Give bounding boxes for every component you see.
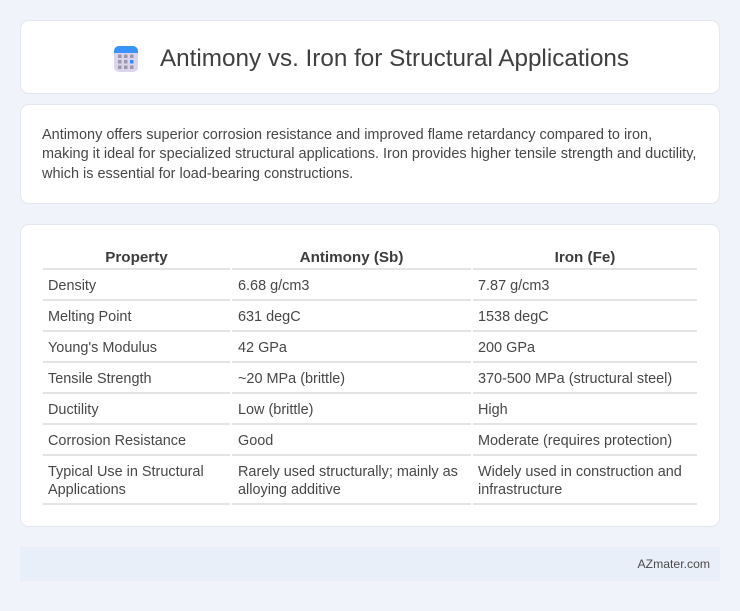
comparison table: 631 degC (238, 309, 301, 325)
header: property: Property (105, 249, 168, 266)
comparison table: 370-500 MPa (structural steel) (478, 371, 672, 387)
summary text: which is essential for load-bearing constructions. (42, 166, 353, 182)
row: youngs modulus (48, 340, 536, 356)
row: tensile strength: Tensile Strength (48, 371, 152, 387)
comparison table: Good (238, 433, 273, 449)
summary text: making it ideal for specialized structural applications. Iron provides higher tensile strength and ductility, (42, 146, 696, 162)
row: density (48, 278, 549, 294)
comparison table: Low (brittle) (238, 402, 313, 418)
row: ductility (48, 402, 508, 418)
row: density: Density (48, 278, 96, 294)
comparison table: alloying additive (238, 482, 341, 498)
title: Antimony vs. Iron for Structural Applications (160, 45, 629, 72)
row: typical use: Typical Use in Structural (48, 464, 204, 480)
summary card (20, 104, 720, 204)
row: corrosion resistance (48, 433, 672, 449)
comparison table: High (478, 402, 508, 418)
row: typical use: Applications (48, 482, 126, 498)
row: ductility: Ductility (48, 402, 99, 418)
row: corrosion resistance: Corrosion Resistance (48, 433, 186, 449)
row: typical use (48, 464, 682, 498)
table card (20, 224, 720, 527)
comparison table: 200 GPa (478, 340, 535, 356)
row: melting point: Melting Point (48, 309, 131, 325)
summary text (42, 127, 696, 182)
row: youngs modulus: Young's Modulus (48, 340, 157, 356)
comparison table: ~20 MPa (brittle) (238, 371, 345, 387)
comparison table: 7.87 g/cm3 (478, 278, 549, 294)
summary text: Antimony offers superior corrosion resistance and improved flame retardancy compared to iron, (42, 127, 652, 143)
comparison table (43, 249, 697, 505)
comparison table: 42 GPa (238, 340, 287, 356)
footer bar (20, 547, 720, 581)
header: antimony: Antimony (Sb) (300, 249, 403, 266)
comparison table: Widely used in construction and (478, 464, 682, 480)
footer credit: AZmater.com (638, 557, 710, 571)
row: melting point (48, 309, 549, 325)
comparison table: infrastructure (478, 482, 562, 498)
comparison table: 6.68 g/cm3 (238, 278, 309, 294)
comparison table: 1538 degC (478, 309, 549, 325)
row: tensile strength (48, 371, 672, 387)
comparison table: Rarely used structurally; mainly as (238, 464, 458, 480)
title card (20, 20, 720, 94)
header: iron: Iron (Fe) (555, 249, 615, 266)
icon: calendar (114, 46, 138, 72)
comparison table: Moderate (requires protection) (478, 433, 672, 449)
